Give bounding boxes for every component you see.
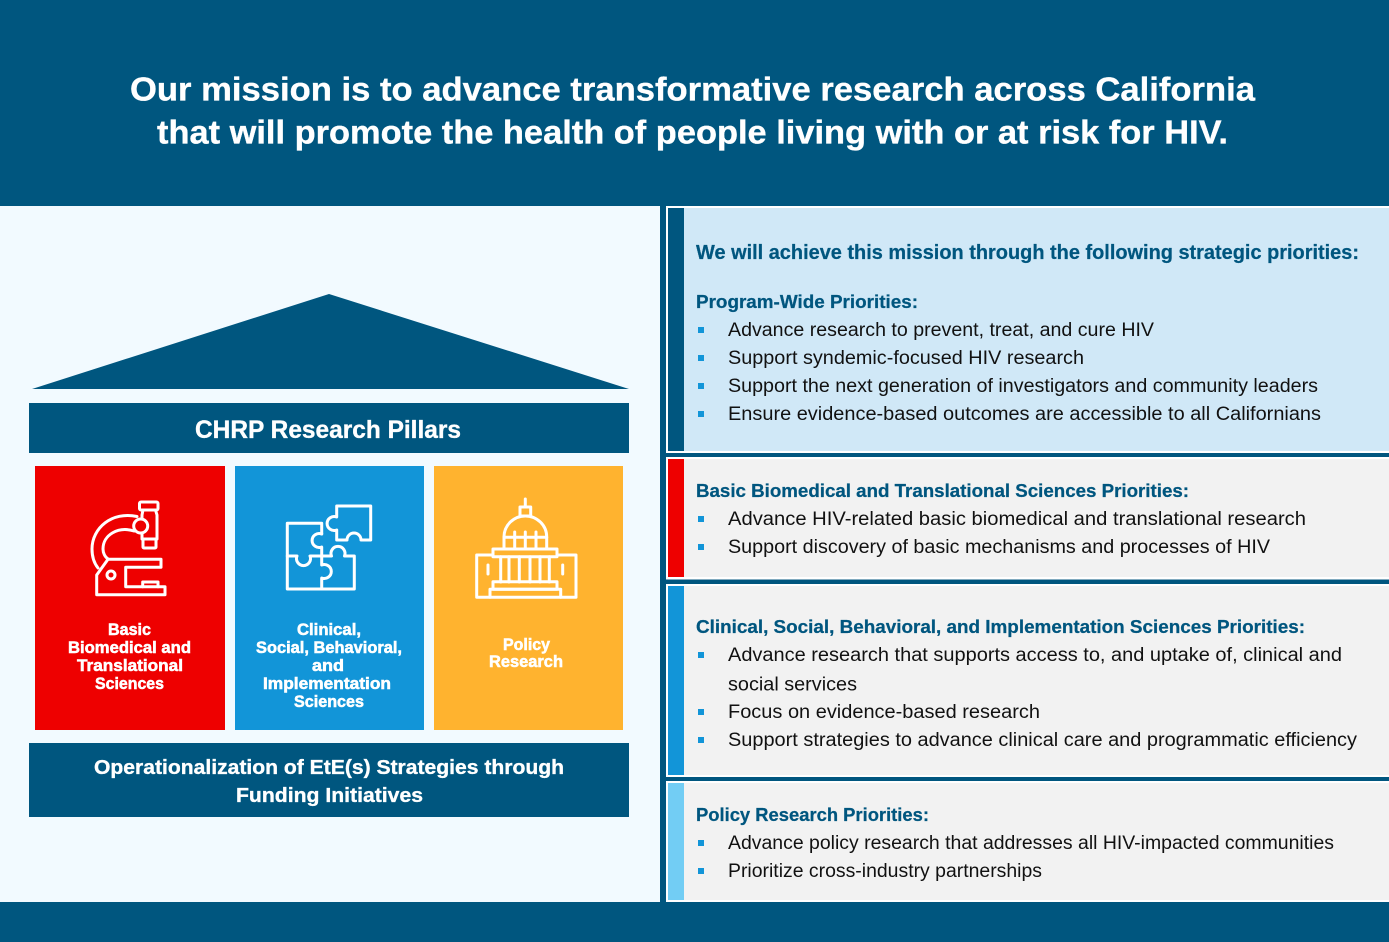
- pillar label: Research: [489, 653, 563, 671]
- bullet list: Prioritize cross-industry partnerships: [728, 861, 1042, 882]
- bullet list: Ensure evidence-based outcomes are accessible to all Californians: [728, 404, 1321, 425]
- pillar label: and: [312, 657, 344, 675]
- pillar label: Clinical,: [297, 621, 361, 639]
- icon: microscope: [92, 502, 165, 595]
- title: mission statement: Our mission is to advance transformative research across California: [130, 70, 1256, 108]
- heading: strategic priorities intro: We will achieve this mission through the following strategic priorities:: [696, 241, 1359, 264]
- panel: clinical, social, behavioral priorities: [666, 584, 1389, 777]
- pillar label: Sciences: [95, 675, 164, 693]
- pillar label: Social, Behavioral,: [256, 639, 402, 657]
- pillar label: [256, 621, 402, 711]
- pillar label: [68, 621, 191, 693]
- bullet list: [698, 645, 1358, 751]
- heading: CHRP Research Pillars: CHRP Research Pillars: [195, 416, 461, 444]
- panel: research pillars house: [0, 206, 660, 902]
- bullet list: [698, 833, 1334, 882]
- pillar label: Sciences: [294, 693, 364, 711]
- bullet list: [698, 509, 1306, 558]
- subheading: program-wide priorities: Program-Wide Priorities:: [696, 291, 918, 312]
- foundation: operationalization banner: [29, 743, 629, 817]
- pillar label: Basic: [108, 621, 151, 639]
- panel: policy research priorities: [666, 781, 1389, 902]
- pillar label: Translational: [77, 657, 183, 675]
- title: mission statement: that will promote the health of people living with or at risk for HIV.: [157, 114, 1228, 150]
- foundation: operationalization banner: Funding Initiatives: [236, 784, 423, 807]
- subheading: policy research priorities: Policy Research Priorities:: [696, 804, 929, 825]
- roof triangle: [32, 294, 629, 389]
- pillar label: Implementation: [263, 675, 391, 693]
- bullet list: Advance policy research that addresses all HIV-impacted communities: [728, 833, 1334, 854]
- bullet list: [698, 320, 1321, 425]
- bullet list: Advance research to prevent, treat, and cure HIV: [728, 320, 1154, 341]
- panel: basic biomedical priorities: [666, 457, 1389, 580]
- bullet list: Support the next generation of investigators and community leaders: [728, 376, 1318, 397]
- pillar label: Policy: [503, 636, 551, 654]
- bullet list: social services: [728, 674, 857, 696]
- panel: program-wide priorities: [666, 206, 1389, 453]
- bullet list: Focus on evidence-based research: [728, 702, 1040, 723]
- pillar label: [489, 636, 563, 671]
- subheading: basic biomedical and translational sciences priorities: Basic Biomedical and Translational Sciences Priorities:: [696, 480, 1189, 501]
- title: mission statement: [130, 70, 1256, 150]
- icon: puzzle pieces: [287, 506, 371, 589]
- pillar: policy research: [434, 466, 623, 730]
- bullet list: Advance HIV-related basic biomedical and translational research: [728, 509, 1306, 530]
- icon: capitol building: [477, 499, 576, 597]
- bullet list: Support syndemic-focused HIV research: [728, 348, 1084, 369]
- pillar label: Biomedical and: [68, 639, 191, 657]
- bullet list: Support discovery of basic mechanisms and processes of HIV: [728, 537, 1270, 558]
- pillar: basic biomedical and translational sciences: [35, 466, 225, 730]
- subheading: clinical, social, behavioral, and implementation sciences priorities: Clinical, Social, Behavioral, and Implementation Sciences Priorities:: [696, 616, 1305, 637]
- bullet list: Advance research that supports access to, and uptake of, clinical and: [728, 645, 1342, 666]
- pillar: clinical, social, behavioral, and implementation sciences: [235, 466, 424, 730]
- heading: CHRP Research Pillars: [29, 403, 629, 453]
- foundation: operationalization banner: Operationalization of EtE(s) Strategies through: [94, 756, 564, 779]
- bullet list: Support strategies to advance clinical care and programmatic efficiency: [728, 730, 1358, 751]
